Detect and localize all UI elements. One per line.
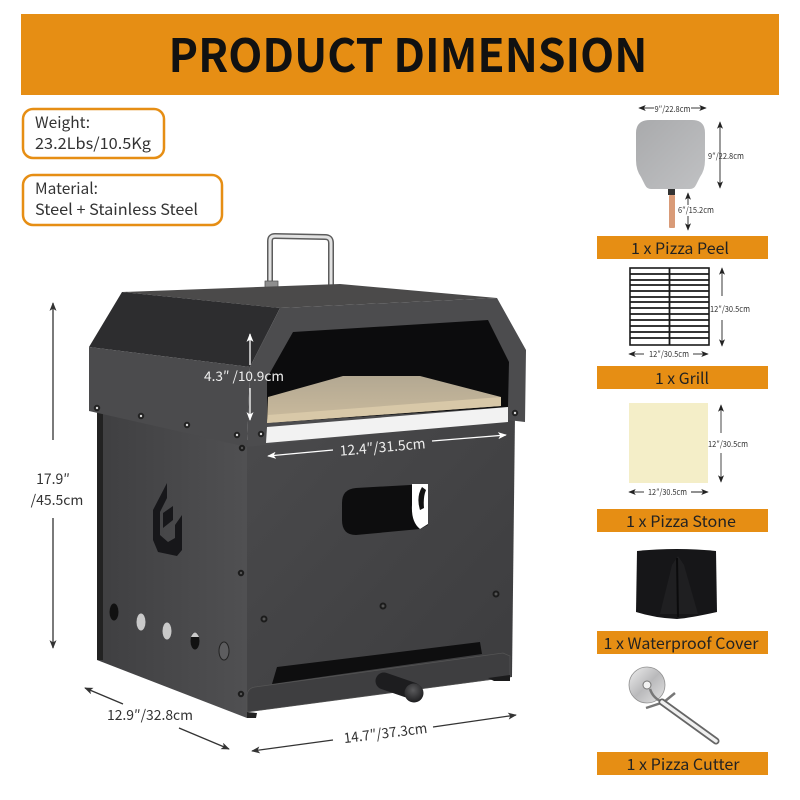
peel dimensions	[639, 107, 654, 109]
pizza oven product image	[89, 236, 526, 718]
accessory: pizza stone: 12″/30.5cm	[648, 486, 687, 498]
oven roof	[122, 284, 497, 308]
dimension: height: /45.5cm	[31, 490, 83, 510]
callout: material: Steel + Stainless Steel	[35, 198, 198, 220]
accessory: pizza peel: 9″/22.8cm	[654, 103, 691, 115]
peel handle	[669, 195, 675, 228]
black knob	[384, 681, 424, 702]
oven left hood	[89, 292, 280, 367]
dimension: opening height	[204, 334, 284, 420]
dimension: height	[31, 303, 83, 648]
label: pizza cutter: 1 x Pizza Cutter	[626, 753, 741, 775]
oven handle	[265, 236, 337, 297]
accessory: pizza peel: 6″/15.2cm	[678, 204, 714, 216]
dimension: depth: 12.9″/32.8cm	[107, 705, 193, 725]
label: pizza cutter	[597, 752, 768, 775]
pizza stone	[267, 376, 501, 423]
ash tray slot	[272, 642, 482, 684]
callout: weight: 23.2Lbs/10.5Kg	[35, 132, 151, 154]
white steel lip	[266, 407, 508, 443]
oven body front	[247, 415, 515, 712]
side logo	[153, 483, 182, 556]
callout: material	[23, 175, 222, 225]
label: pizza peel: 1 x Pizza Peel	[631, 237, 729, 259]
dimension: width: 14.7″/37.3cm	[342, 718, 428, 748]
dimension: opening width	[268, 433, 506, 461]
callout: weight	[23, 109, 164, 158]
label: pizza stone	[597, 509, 768, 532]
dimension: opening height: 4.3″ /10.9cm	[204, 365, 284, 385]
dimension: depth	[85, 688, 229, 749]
cutter arms	[646, 689, 675, 708]
accessory: pizza cutter	[629, 667, 716, 741]
callout: weight: Weight:	[35, 111, 90, 133]
oven opening	[267, 320, 509, 423]
cutter handle	[662, 702, 716, 741]
label: pizza peel	[597, 236, 768, 259]
grill grate	[630, 268, 709, 345]
grill dimensions	[721, 268, 723, 296]
front window	[342, 484, 428, 535]
dimension: height: 17.9″	[36, 469, 70, 489]
cutter wheel	[629, 667, 665, 703]
dimension: width	[252, 715, 516, 751]
accessory: pizza stone: 12″/30.5cm	[708, 438, 748, 450]
accessory: grill: 12″/30.5cm	[710, 303, 750, 315]
accessory: waterproof cover	[636, 549, 717, 619]
label: waterproof cover: 1 x Waterproof Cover	[604, 632, 760, 654]
callout: material: Material:	[35, 177, 98, 199]
label: grill: 1 x Grill	[655, 367, 709, 389]
accessory: grill	[629, 268, 750, 360]
title banner	[21, 14, 779, 95]
accessory: pizza peel: 9″/22.8cm	[708, 150, 744, 162]
accessory: pizza stone	[629, 403, 748, 498]
accessory: grill: 12″/30.5cm	[649, 348, 689, 360]
stone dimensions	[720, 405, 722, 433]
accessory: pizza peel	[636, 103, 744, 230]
dimension: opening width: 12.4″/31.5cm	[339, 433, 426, 461]
oven body left side	[97, 410, 247, 718]
side vent holes	[110, 604, 229, 660]
oven front hood	[247, 298, 526, 447]
rivets	[95, 406, 517, 437]
peel blade	[636, 120, 705, 189]
label: pizza stone: 1 x Pizza Stone	[626, 510, 736, 532]
label: grill	[597, 366, 768, 389]
title: PRODUCT DIMENSION	[168, 20, 648, 86]
